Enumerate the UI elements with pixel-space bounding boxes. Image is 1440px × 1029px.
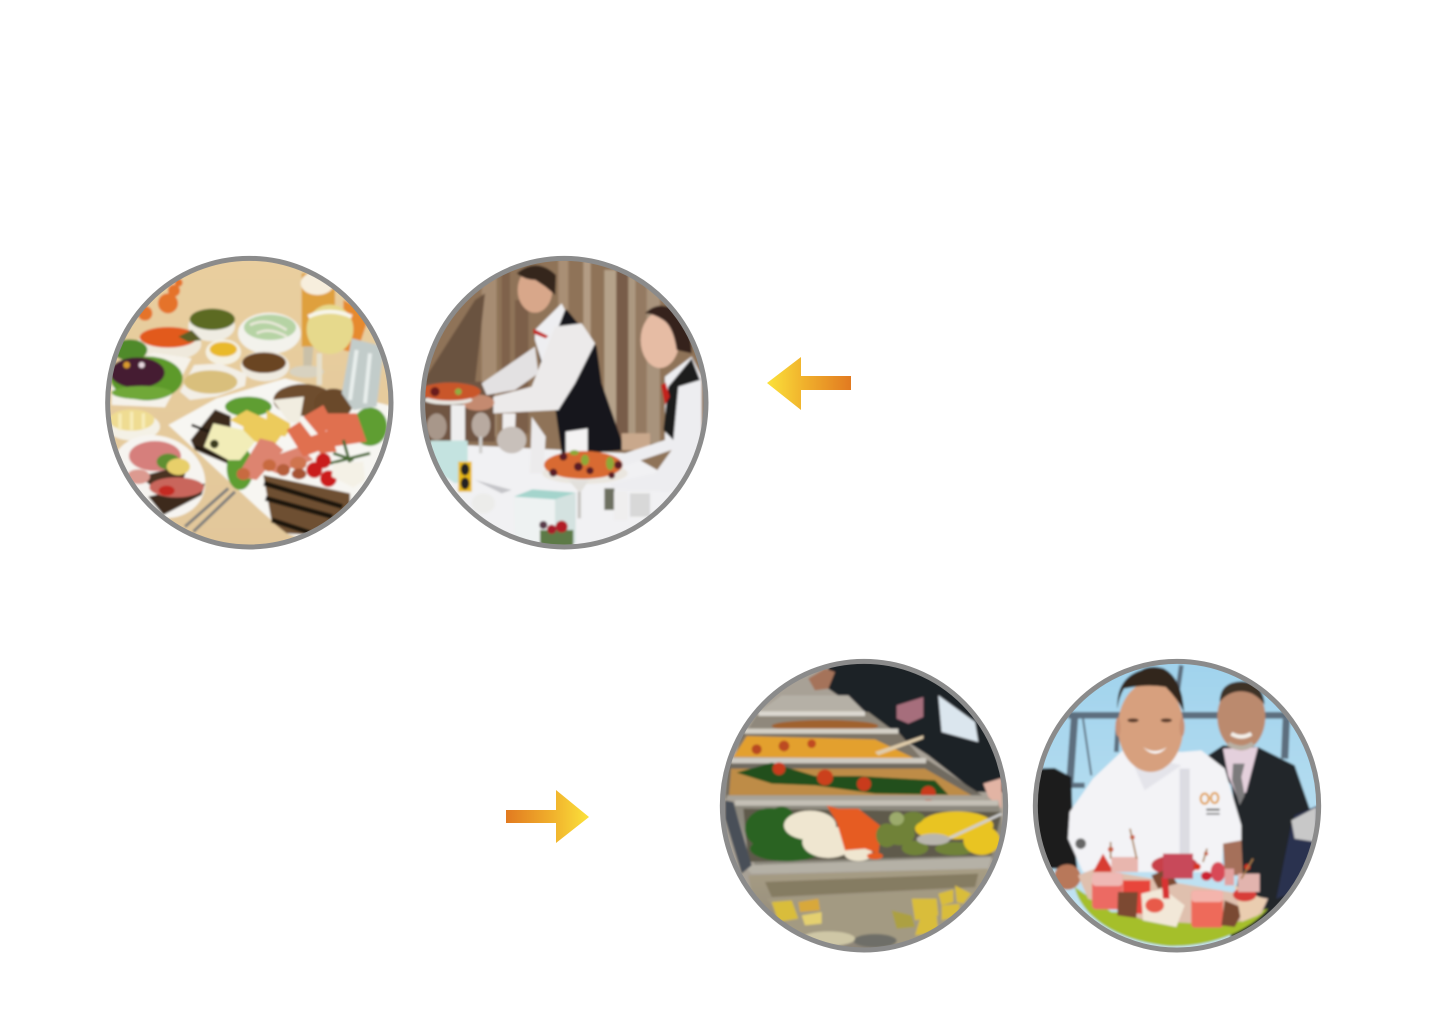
second man's face <box>1217 684 1265 750</box>
woman's face and hair <box>641 312 679 368</box>
swiss cheese <box>204 423 255 460</box>
man's hair and face <box>518 267 552 313</box>
carrots <box>827 805 883 859</box>
rice and greens tray <box>725 758 985 801</box>
large white platter <box>168 378 393 543</box>
beet salad plate <box>110 339 192 407</box>
sky through windows <box>1028 652 1328 957</box>
man in suit behind <box>1208 681 1315 957</box>
chef jacket <box>1068 747 1241 872</box>
sandwich plate <box>118 434 207 520</box>
yellow peppers <box>915 811 1000 855</box>
circle border <box>423 258 706 547</box>
dark rye bread under cheese <box>191 409 231 465</box>
wine glass <box>307 305 353 385</box>
cauliflower <box>784 811 872 861</box>
rosemary and tomatoes <box>306 440 370 487</box>
sprouts <box>876 812 975 855</box>
window frames <box>1068 665 1295 785</box>
front tray potatoes <box>772 885 971 935</box>
chef logo <box>1075 793 1220 849</box>
butter bowl <box>107 409 160 441</box>
large vegetable tray <box>733 800 1008 874</box>
woman's waistcoat <box>663 358 700 440</box>
arrow pointing left <box>767 357 851 410</box>
cutlery <box>185 488 235 532</box>
circle border <box>108 258 391 547</box>
yellow and black bottle <box>458 462 472 492</box>
front tray <box>748 869 988 952</box>
white table <box>431 443 675 544</box>
green dessert bowl <box>1075 887 1268 946</box>
beer glass <box>289 272 335 378</box>
far tray rows <box>748 695 895 732</box>
infographic canvas <box>105 256 1322 952</box>
man's shirt and arms <box>535 303 565 367</box>
chef head <box>1115 667 1185 772</box>
person right edge <box>1276 805 1318 899</box>
woman's shirt and arm <box>610 357 702 492</box>
orange drink behind <box>343 300 370 353</box>
water glass <box>342 338 384 410</box>
round brown bread <box>273 384 353 419</box>
food at left edge <box>1054 864 1081 890</box>
table glasses and white napkins <box>426 404 651 454</box>
curtain stripes <box>482 257 660 443</box>
suit body <box>1208 745 1315 957</box>
photo circle: buffet chafing dishes <box>715 652 1015 957</box>
serving spoon <box>948 814 1002 839</box>
yellow cheese slices <box>230 410 290 447</box>
orange flowers <box>138 279 183 321</box>
photo circle: buffet spread of cold cuts, cheese and salads <box>98 250 400 555</box>
brie wedge <box>273 397 304 423</box>
fries tray <box>733 729 923 759</box>
person left edge <box>1035 768 1077 869</box>
tray left rails <box>725 800 752 874</box>
mint glass cube with flowers <box>514 489 576 547</box>
fruit plate held by man <box>419 383 481 405</box>
stacked rye crispbread <box>263 475 350 535</box>
desserts on tray <box>1078 829 1268 928</box>
mint glass cube left <box>430 441 468 483</box>
fruit platter <box>542 450 628 484</box>
man's waistcoat and trousers <box>535 309 625 453</box>
man in waistcoat <box>462 265 625 453</box>
creamy dip dish <box>180 363 247 400</box>
smoked salmon style ham <box>287 405 367 457</box>
broccoli <box>745 807 823 861</box>
dark clothed guests background <box>828 662 1005 792</box>
mustard dish <box>206 339 241 365</box>
collar and tie <box>1223 747 1258 799</box>
soft cheese wedge <box>332 462 365 487</box>
circle border <box>722 661 1006 950</box>
rolled ham slices <box>237 438 313 480</box>
cucumber salad bowl <box>238 313 301 354</box>
dark left curtain <box>422 293 485 383</box>
photo circle: waiters laying a banquet table <box>415 250 715 555</box>
carrot salad bowl <box>137 327 202 361</box>
circle border <box>1035 661 1319 950</box>
green bean bowl <box>188 309 235 341</box>
photo circle: smiling chef holding a dessert tray <box>1028 652 1328 957</box>
arrow pointing right <box>506 790 589 843</box>
chef forearm <box>1223 840 1243 875</box>
glasses on the table <box>472 480 650 520</box>
brown sauce dish <box>241 351 289 381</box>
lettuce <box>225 397 387 490</box>
woman waiter <box>610 306 702 492</box>
